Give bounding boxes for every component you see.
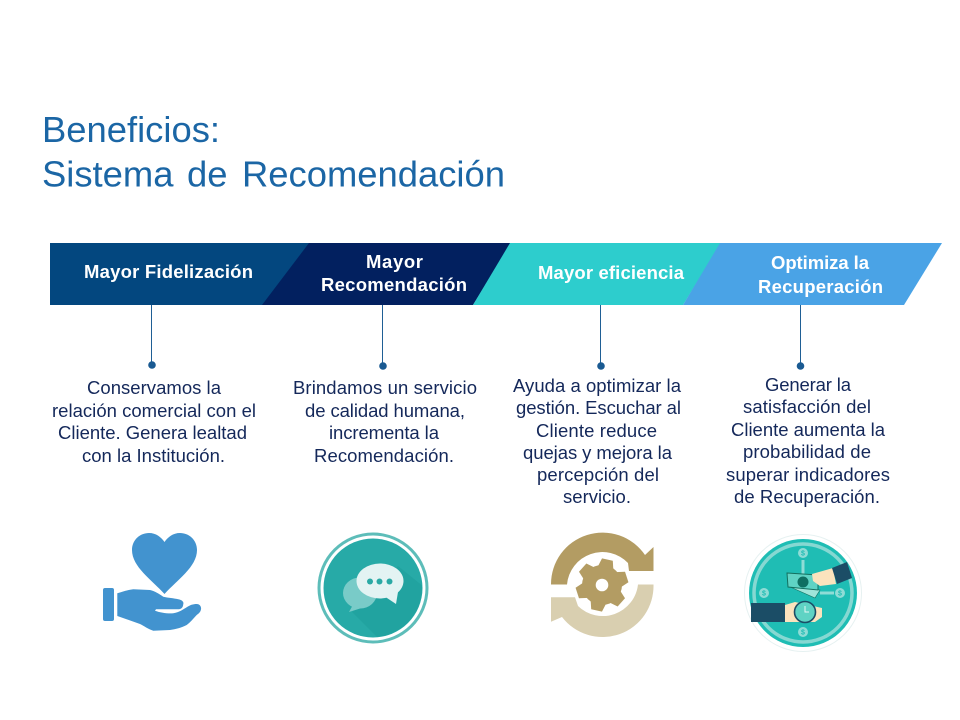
connector 4 [797, 305, 804, 370]
ribbon header band [50, 243, 942, 305]
icon: chat bubbles in circle [318, 532, 428, 644]
text block: recuperación: de Recuperación. [734, 486, 880, 507]
title [42, 109, 505, 194]
segment: Mayor Recomendación: Recomendación [321, 274, 467, 295]
icon: hands exchanging money and time: $ [838, 590, 842, 598]
text block: eficiencia [513, 375, 682, 507]
segment: Mayor Recomendación [262, 243, 511, 305]
icon: gear with cycle arrows [551, 533, 654, 637]
text block: recomendación: Recomendación. [314, 445, 454, 466]
text block: recuperación: Generar la [765, 374, 852, 395]
segment: Optimiza la Recuperación [683, 243, 942, 305]
text block: eficiencia: gestión. Escuchar al [516, 397, 681, 418]
text block: eficiencia: servicio. [563, 486, 631, 507]
text block: recomendación: Brindamos un servicio [293, 377, 477, 398]
connector 1 [148, 305, 156, 369]
text block: recomendación [293, 377, 477, 466]
segment: Optimiza la Recuperación: Recuperación [758, 276, 883, 297]
text block: recomendación: de calidad humana, [305, 400, 465, 421]
icon: hands exchanging money and time: $ [762, 590, 766, 598]
segment: Mayor eficiencia: Mayor eficiencia [538, 262, 685, 283]
segment: Optimiza la Recuperación: Optimiza la [771, 252, 870, 273]
text block: fidelización: con la Institución. [82, 445, 225, 466]
icon: hands exchanging money and time [744, 534, 862, 652]
segment: Mayor Recomendación: Mayor [366, 251, 423, 272]
text block: eficiencia: Cliente reduce [536, 420, 657, 441]
text block: recuperación: satisfacción del [743, 396, 871, 417]
infographic canvas [44, 116, 942, 652]
text block: fidelización: relación comercial con el [52, 400, 256, 421]
icon: heart in hand [103, 533, 201, 631]
segment: Mayor eficiencia [473, 243, 721, 305]
text block: recomendación: incrementa la [329, 422, 440, 443]
text block: eficiencia: quejas y mejora la [523, 442, 673, 463]
text block: eficiencia: percepción del [537, 464, 659, 485]
title: de [187, 154, 227, 194]
text block: recuperación [726, 374, 890, 507]
segment: Mayor Fidelización: Mayor Fidelización [84, 261, 253, 282]
text block: recuperación: Cliente aumenta la [731, 419, 886, 440]
text block: fidelización: Cliente. Genera lealtad [58, 422, 247, 443]
title: Recomendación [242, 154, 505, 194]
title: Beneficios: [42, 109, 220, 150]
segment: Mayor Fidelización [50, 243, 310, 305]
text block: eficiencia: Ayuda a optimizar la [513, 375, 682, 396]
text block: recuperación: superar indicadores [726, 464, 890, 485]
text block: recuperación: probabilidad de [743, 441, 871, 462]
text block: fidelización [52, 377, 256, 466]
icon: hands exchanging money and time: $ [801, 550, 805, 558]
title: Sistema [42, 154, 174, 194]
text block: fidelización: Conservamos la [87, 377, 222, 398]
connector 3 [597, 305, 605, 370]
icon: hands exchanging money and time: $ [801, 630, 805, 636]
connector 2 [379, 305, 387, 370]
